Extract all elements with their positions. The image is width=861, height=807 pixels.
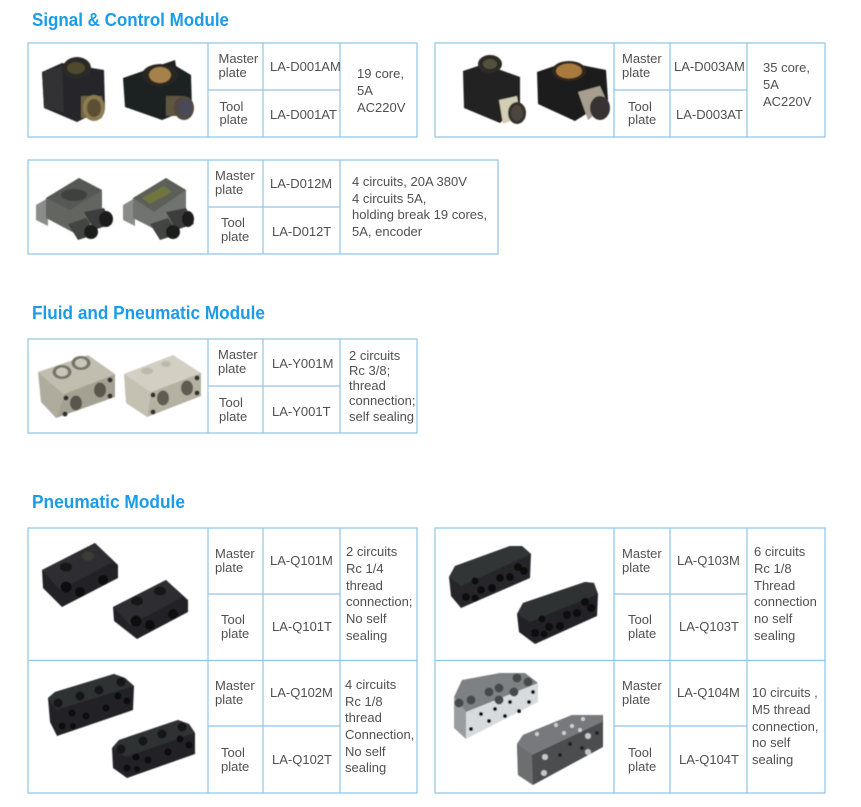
part numbers: LA-Q103: LA-Q103M [677, 553, 740, 568]
panel: LA-D003A: plate [622, 65, 650, 80]
panel: LA-Q101 and LA-Q102 [28, 528, 417, 793]
part numbers: LA-Q104: LA-Q104M [677, 685, 740, 700]
panel: LA-Y001: self sealing [349, 409, 414, 424]
labels: LA-Q101 tool: Tool [221, 612, 245, 627]
image: LA-D003A connectors [463, 55, 610, 124]
panel: LA-D001A: 5A [357, 83, 373, 98]
panel: LA-Q101 and LA-Q102: thread [346, 578, 383, 593]
heading: Pneumatic Module: Pneumatic Module [32, 492, 185, 512]
specification: LA-Q101: 2 circuits [346, 544, 398, 559]
part numbers: LA-Q102: LA-Q102M [270, 685, 333, 700]
image: LA-Q102 blocks [48, 674, 195, 778]
part numbers: LA-Y001M [272, 356, 333, 371]
heading: Signal & Control Module: Signal & Control Module [32, 10, 229, 30]
panel: LA-Q101 and LA-Q102: No self [345, 744, 386, 759]
image: LA-Q104 blocks [454, 673, 603, 785]
panel: LA-D001A [28, 43, 417, 137]
panel: LA-Q101 and LA-Q102: LA-Q101T [272, 619, 332, 634]
specification: LA-Q102: 4 circuits [345, 677, 397, 692]
part numbers: LA-D003AM [674, 59, 745, 74]
panel: LA-Q103 and LA-Q104: plate [622, 692, 650, 707]
panel: LA-D012: LA-D012T [272, 224, 331, 239]
labels: LA-Q103 tool: Tool [628, 612, 652, 627]
specification: 2 circuits [349, 348, 401, 363]
panel: LA-Q101 and LA-Q102: Rc 1/4 [346, 561, 384, 576]
panel: LA-Y001: LA-Y001T [272, 404, 331, 419]
panel: LA-D003A [435, 43, 825, 137]
part numbers: LA-D001AM [270, 59, 341, 74]
panel: LA-Q101 and LA-Q102: plate [215, 560, 243, 575]
panel: LA-Q103 and LA-Q104: no self [752, 735, 791, 750]
panel: LA-Q103 and LA-Q104: connection, [752, 719, 818, 734]
panel: LA-D012: plate [215, 182, 243, 197]
panel: LA-Y001: thread [349, 378, 386, 393]
panel: LA-Q103 and LA-Q104: LA-Q104T [679, 752, 739, 767]
panel: LA-Q101 and LA-Q102: No self [346, 611, 387, 626]
panel: LA-D012: 4 circuits 5A, [352, 191, 426, 206]
panel: LA-Q103 and LA-Q104: plate [628, 626, 656, 641]
image: LA-Q103 blocks [449, 546, 598, 644]
panel: LA-Q101 and LA-Q102: LA-Q102T [272, 752, 332, 767]
label: Tool plate: Tool [221, 215, 245, 230]
image: LA-Y001 blocks [38, 355, 201, 418]
labels: LA-Q102 plates: Master [215, 678, 255, 693]
specification: 19 core, [357, 66, 404, 81]
panel: LA-D003A: 5A [763, 77, 779, 92]
part numbers: LA-Q101: LA-Q101M [270, 553, 333, 568]
label: Tool plate: Tool [220, 99, 243, 114]
panel: LA-D003A: plate [628, 112, 656, 127]
panel: LA-Q101 and LA-Q102: Connection, [345, 727, 414, 742]
panel: LA-Q101 and LA-Q102: plate [215, 692, 243, 707]
image: LA-D012 connectors [36, 178, 194, 240]
labels: LA-Q103 master: Master [622, 546, 662, 561]
specification: 4 circuits, 20A 380V [352, 174, 467, 189]
panel: LA-Q103 and LA-Q104 [435, 528, 825, 793]
panel: LA-Q101 and LA-Q102: plate [221, 626, 249, 641]
panel: LA-D001A: AC220V [357, 100, 406, 115]
panel: LA-Q101 and LA-Q102: sealing [345, 760, 386, 775]
label: Tool plate: Tool [628, 99, 652, 114]
panel: LA-Y001: plate [219, 409, 247, 424]
panel: LA-Y001: connection; [349, 393, 416, 408]
panel: LA-Y001: plate [218, 361, 246, 376]
panel: LA-Q103 and LA-Q104: sealing [754, 628, 795, 643]
label: Master plate: Master [218, 51, 259, 66]
image: LA-Q101 blocks [42, 543, 188, 639]
panel: LA-D012 [28, 160, 498, 254]
panel: LA-D012: plate [221, 229, 249, 244]
panel: LA-Q101 and LA-Q102: plate [221, 759, 249, 774]
panel: LA-Q101 and LA-Q102: thread [345, 710, 382, 725]
panel: LA-D012: 5A, encoder [352, 224, 423, 239]
panel: LA-D003A: LA-D003AT [676, 107, 743, 122]
labels: LA-Q104 tool: Tool [628, 745, 652, 760]
panel: LA-D003A: AC220V [763, 94, 812, 109]
panel: LA-Q103 and LA-Q104: M5 thread [752, 702, 811, 717]
specification: LA-Q104: 10 circuits , [752, 685, 818, 700]
specification: 35 core, [763, 60, 810, 75]
specification: LA-Q103: 6 circuits [754, 544, 806, 559]
panel: LA-Y001: Rc 3/8; [349, 363, 390, 378]
panel: LA-Q103 and LA-Q104: plate [628, 759, 656, 774]
panel: LA-D001A: LA-D001AT [270, 107, 337, 122]
label: Master plate: Master [218, 347, 258, 362]
panel: LA-Q101 and LA-Q102: Rc 1/8 [345, 694, 383, 709]
panel: LA-D001A: plate [218, 65, 247, 80]
panel: LA-Q103 and LA-Q104: Thread [754, 578, 795, 593]
panel: LA-Q103 and LA-Q104: no self [754, 611, 793, 626]
labels: LA-Q102 tool: Tool [221, 745, 245, 760]
labels: LA-Q104 master: Master [622, 678, 662, 693]
panel: LA-Q103 and LA-Q104: sealing [752, 752, 793, 767]
labels: LA-Q101 plates: Master [215, 546, 255, 561]
part numbers: LA-D012M [270, 176, 332, 191]
image: LA-D001A connectors [42, 57, 194, 122]
panel: LA-Q103 and LA-Q104: LA-Q103T [679, 619, 739, 634]
panel: LA-Q103 and LA-Q104: Rc 1/8 [754, 561, 792, 576]
panel: LA-Q103 and LA-Q104: connection [754, 594, 817, 609]
panel: LA-D012: holding break 19 cores, [352, 207, 487, 222]
heading: Fluid and Pneumatic Module: Fluid and Pneumatic Module [32, 303, 265, 323]
panel: LA-Y001 [28, 339, 417, 433]
panel: LA-Q103 and LA-Q104: plate [622, 560, 650, 575]
label: Master plate: Master [622, 51, 662, 66]
panel: LA-D001A: plate [220, 112, 248, 127]
panel: LA-Q101 and LA-Q102: sealing [346, 628, 387, 643]
panel: LA-Q101 and LA-Q102: connection; [346, 594, 412, 609]
label: Master plate: Master [215, 168, 255, 183]
label: Tool plate: Tool [219, 395, 243, 410]
